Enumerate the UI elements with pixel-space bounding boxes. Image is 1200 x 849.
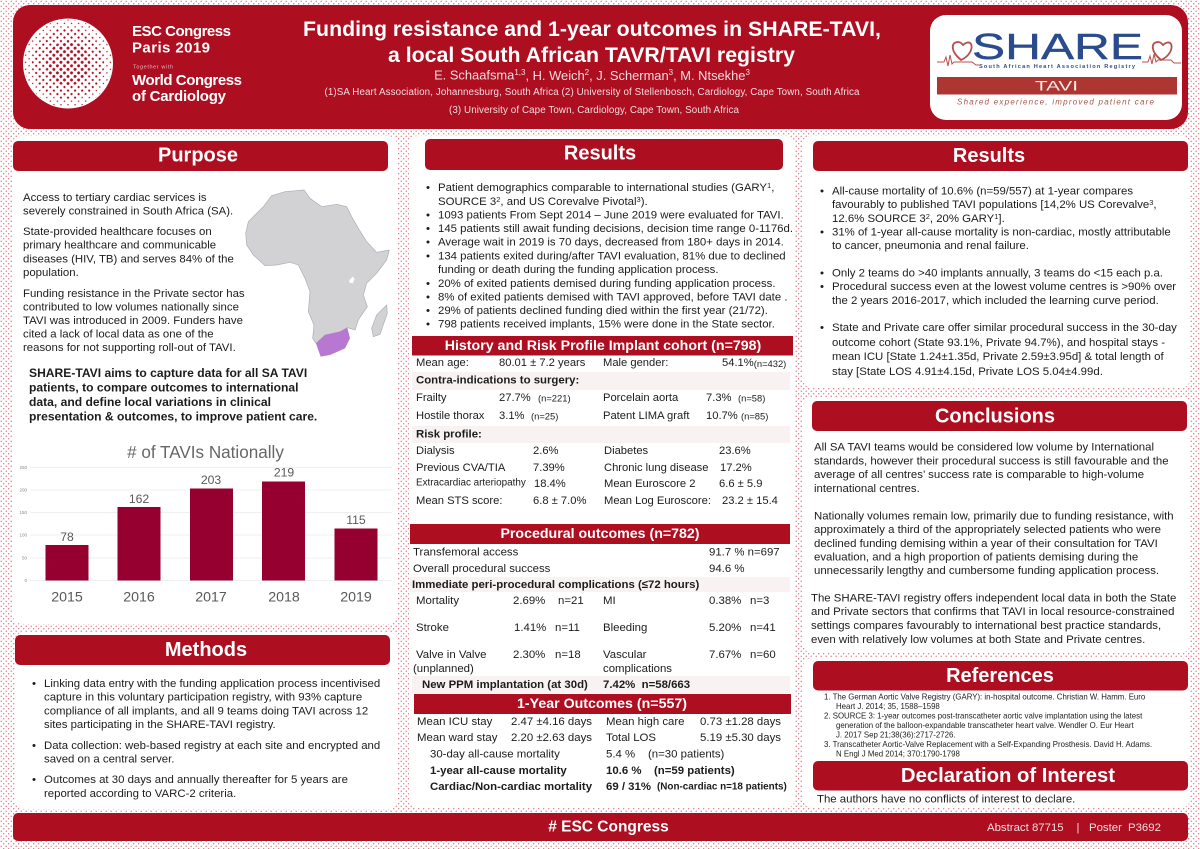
- table: history and risk profile: 23.2 ± 15.4: [722, 495, 778, 507]
- table: history and risk profile: Chronic lung disease: [604, 462, 708, 474]
- ESC congress wordmark: Together with: [133, 64, 173, 70]
- table: history and risk profile: (n=25): [531, 410, 558, 422]
- bar value labels: 162: [129, 492, 149, 506]
- bar value labels: [60, 466, 366, 544]
- table: 1-year outcomes: Mean ICU stay: [417, 716, 493, 728]
- table: history and risk profile: (n=221): [538, 392, 571, 404]
- methods bullets: •: [32, 740, 36, 752]
- results bullets: •: [820, 268, 824, 280]
- panel: results column three: [803, 136, 1190, 388]
- results bullets: 1: [767, 180, 771, 190]
- table header: Procedural outcomes (n=782): [500, 526, 700, 542]
- table: history and risk profile: (n=85): [741, 410, 768, 422]
- heading: conclusions: [812, 401, 1187, 431]
- conclusions text: [811, 442, 1176, 646]
- table: history and risk profile: 18.4%: [534, 478, 566, 490]
- purpose text: reasons for not supporting roll-out of TAVI.: [23, 342, 236, 354]
- y axis labels: 200: [19, 488, 27, 492]
- SHARE-TAVI logo: TAVI: [1035, 78, 1078, 94]
- hashtag: # ESC Congress: [548, 818, 669, 836]
- table: history and risk profile: 80.01 ± 7.2 years: [499, 357, 586, 369]
- year labels: 2016: [123, 590, 155, 606]
- methods bullets: Data collection: web-based registry at each site and encrypted and: [44, 740, 380, 752]
- authors: 3: [669, 68, 674, 76]
- table: history and risk profile: 2.6%: [533, 445, 559, 457]
- table: history and risk profile: 6.8 ± 7.0%: [533, 495, 586, 507]
- conclusions text: average of all centres’ success rate is comparable to high-volume: [814, 469, 1144, 481]
- abstract and poster numbers: P3692: [1128, 822, 1161, 834]
- results bullets: State and Private care offer similar procedural success in the 30-day: [832, 322, 1177, 334]
- purpose text: diseases (HIV, TB) and serves 84% of the: [23, 254, 234, 266]
- year labels: 2015: [51, 590, 83, 606]
- heading: conclusions: Conclusions: [935, 406, 1055, 428]
- table: procedural outcomes: 0.38%: [709, 595, 741, 607]
- table: procedural outcomes: 2.30%: [513, 649, 545, 661]
- results bullets: , and US Corevalve Pivotal: [500, 196, 637, 208]
- table: history and risk profile: 7.3%: [706, 392, 732, 404]
- results bullets: •: [820, 281, 824, 293]
- table: 1-year outcomes: 5.4 %: [606, 748, 635, 760]
- table: procedural outcomes: Vascular: [603, 649, 647, 661]
- results bullets: •: [820, 226, 824, 238]
- year labels: [51, 590, 372, 606]
- affiliations: (1)SA Heart Association, Johannesburg, South Africa (2) University of Stellenbosch, Cardiology, Cape Town, South Africa: [324, 87, 860, 98]
- footer bar: [13, 813, 1188, 841]
- results bullets: the 2 years 2016-2017, which included the learning curve period.: [832, 295, 1159, 307]
- SHARE-TAVI logo: [930, 15, 1182, 120]
- table: procedural outcomes: 7.67%: [709, 649, 741, 661]
- table: history and risk profile: Diabetes: [604, 445, 649, 457]
- results bullets: 134 patients exited during/after TAVI evaluation, 81% due to declined: [438, 250, 786, 262]
- table: 1-year outcomes: 30-day all-cause mortality: [430, 748, 560, 760]
- SHARE-TAVI logo: Shared experience, improved patient care: [957, 98, 1155, 106]
- heading: results: Results: [564, 142, 636, 164]
- heading: results: [813, 141, 1188, 171]
- results bullets: funding or death during the funding application process.: [438, 264, 719, 276]
- table: 1-year outcomes: 5.19 ±5.30 days: [700, 732, 781, 744]
- results bullets: 3: [1149, 198, 1153, 206]
- year labels: 2017: [195, 590, 227, 606]
- heading: references: [813, 661, 1188, 690]
- purpose text: TAVI was introduced in 2009. Funders have: [23, 315, 243, 327]
- ESC congress wordmark: Paris 2019: [132, 40, 210, 56]
- purpose text: cited a lack of local data as one of the: [23, 328, 214, 340]
- table: procedural outcomes: [410, 524, 790, 693]
- table: procedural outcomes: MI: [603, 595, 616, 607]
- table: history and risk profile: Hostile thorax: [416, 410, 485, 422]
- reference list: [824, 692, 1152, 758]
- y axis labels: [19, 465, 27, 583]
- y axis labels: 100: [19, 532, 27, 538]
- table: history and risk profile: Frailty: [416, 392, 447, 404]
- results bullets: •: [820, 322, 824, 334]
- table: history and risk profile: Male gender:: [603, 357, 668, 369]
- results bullets: 2: [496, 194, 500, 204]
- icon: hearts and ECG lines: [937, 42, 1181, 66]
- table: procedural outcomes: 1.41%: [514, 622, 546, 634]
- conclusions text: unnecessarily lengthy and cumbersome funding application process.: [814, 565, 1159, 577]
- authors: , J. Scherman: [589, 68, 669, 82]
- table: 1-year outcomes: 10.6 %: [606, 765, 641, 777]
- table header: [412, 336, 793, 356]
- table: procedural outcomes: New PPM implantation (at 30d): [422, 679, 588, 691]
- table: procedural outcomes: n=18: [555, 649, 581, 661]
- results bullets: 1093 patients From Sept 2014 – June 2019 were evaluated for TAVI.: [438, 210, 784, 222]
- aim statement: patients, to compare outcomes to international: [29, 380, 298, 394]
- table: 1-year outcomes: 69 / 31%: [606, 781, 651, 793]
- chart title: # of TAVIs Nationally: [127, 443, 284, 462]
- table header: 1-Year Outcomes (n=557): [517, 696, 687, 712]
- conclusions text: and Private sectors that confirms that TAVI in local resource-constrained: [811, 606, 1174, 618]
- aim statement: data, and define local variations in clinical: [29, 395, 271, 409]
- results bullets: [820, 186, 1177, 378]
- ESC congress wordmark: [132, 23, 242, 105]
- table: history and risk profile: Porcelain aorta: [603, 392, 679, 404]
- abstract and poster numbers: Abstract 87715: [987, 822, 1064, 834]
- table: procedural outcomes: (unplanned): [413, 663, 474, 675]
- table: history and risk profile: Risk profile:: [416, 428, 482, 440]
- y axis labels: 50: [22, 556, 27, 560]
- results bullets: [426, 180, 793, 331]
- table: history and risk profile: Dialysis: [416, 445, 455, 457]
- table: 1-year outcomes: Cardiac/Non-cardiac mortality: [430, 781, 593, 793]
- results bullets: •: [426, 319, 430, 331]
- declaration text: The authors have no conflicts of interest to declare.: [817, 794, 1075, 806]
- table: history and risk profile: [412, 336, 793, 507]
- results bullets: •: [426, 278, 430, 290]
- table: procedural outcomes: n=41: [750, 622, 776, 634]
- abstract and poster numbers: |: [1076, 822, 1079, 834]
- year labels: 2018: [268, 590, 300, 606]
- table: 1-year outcomes: Mean ward stay: [417, 732, 498, 744]
- affiliations: [324, 87, 860, 116]
- results bullets: •: [820, 186, 824, 198]
- heading: declaration of interest: [813, 761, 1188, 790]
- affiliations: (3) University of Cape Town, Cardiology, Cape Town, South Africa: [449, 105, 740, 116]
- icon: map of Africa with South Africa highlighted: [246, 190, 389, 357]
- table: 1-year outcomes: Total LOS: [606, 732, 656, 744]
- table: procedural outcomes: 5.20%: [709, 622, 741, 634]
- conclusions text: international centres.: [814, 483, 920, 495]
- conclusions text: evaluation, and a high proportion of patients demising during the: [814, 552, 1138, 564]
- heading: results: Results: [953, 145, 1025, 167]
- results bullets: 1: [994, 212, 998, 220]
- table: procedural outcomes: 94.6 %: [709, 563, 744, 575]
- table header: History and Risk Profile Implant cohort (n=798): [445, 338, 762, 354]
- purpose text: population.: [23, 267, 79, 279]
- results bullets: , 20% GARY: [930, 213, 995, 225]
- conclusions text: settings compares favourably to international best practice standards,: [811, 620, 1161, 632]
- table: 1-year outcomes: 1-year all-cause mortality: [430, 765, 567, 777]
- methods bullets: capture in this voluntary participation registry, with 93% capture: [44, 692, 362, 704]
- conclusions text: declined funding demising within a year of their consultation for TAVI: [814, 538, 1158, 550]
- icon: ESC dotted globe: [23, 18, 113, 108]
- authors: , H. Weich: [525, 68, 585, 82]
- reference list: 2. SOURCE 3: 1-year outcomes post-transcatheter aortic valve implantation using the latest: [824, 712, 1143, 720]
- results bullets: Patient demographics comparable to international studies (GARY: [438, 182, 767, 194]
- results bullets: Only 2 teams do >40 implants annually, 3 teams do <15 each p.a.: [832, 268, 1163, 280]
- table: 1-year outcomes: [414, 694, 791, 793]
- table: history and risk profile: 27.7%: [499, 392, 531, 404]
- reference list: Heart J. 2014; 35, 1588–1598: [836, 702, 940, 711]
- SHARE-TAVI logo: SHARE: [972, 26, 1143, 67]
- heading: references: References: [946, 665, 1054, 687]
- methods bullets: [32, 678, 380, 800]
- authors: 3: [745, 68, 750, 76]
- table: procedural outcomes: complications: [603, 663, 672, 675]
- table: history and risk profile: Mean age:: [416, 357, 469, 369]
- table: 1-year outcomes: 2.20 ±2.63 days: [511, 732, 592, 744]
- conclusions text: Nationally volumes remain low, primarily due to funding resistance, with: [814, 510, 1174, 522]
- purpose text: Funding resistance in the Private sector has: [23, 288, 245, 300]
- table: history and risk profile: 54.1%(n=432): [722, 357, 786, 369]
- results bullets: stay [State LOS 4.91±4.15d, Private LOS 5.04±4.99d.: [832, 366, 1103, 378]
- table: procedural outcomes: Transfemoral access: [413, 546, 519, 558]
- table: 1-year outcomes: (n=59 patients): [654, 765, 735, 777]
- table: history and risk profile: 6.6 ± 5.9: [719, 478, 762, 490]
- conclusions text: approximately a third of the appropriately selected patients who were: [814, 524, 1161, 536]
- purpose text: Access to tertiary cardiac services is: [23, 192, 207, 204]
- purpose text: [23, 192, 245, 354]
- ESC congress wordmark: World Congress: [132, 72, 242, 89]
- methods bullets: saved on a central server.: [44, 754, 174, 766]
- aim statement: [29, 366, 317, 424]
- panel: results column two: [409, 136, 795, 808]
- results bullets: •: [426, 182, 430, 194]
- results bullets: to cancer, pneumonia and renal failure.: [832, 240, 1029, 252]
- results bullets: 20% of exited patients demised during funding application process.: [438, 278, 776, 290]
- heading: declaration of interest: Declaration of Interest: [901, 765, 1115, 787]
- conclusions text: even with relatively low volumes at both State and Private centres.: [811, 634, 1145, 646]
- title: a local South African TAVR/TAVI registry: [388, 43, 795, 67]
- conclusions text: standards, however their procedural success is still favourable and the: [814, 456, 1169, 468]
- heading: methods: Methods: [165, 639, 247, 661]
- table: procedural outcomes: Overall procedural success: [413, 563, 551, 575]
- results bullets: favourably to published TAVI populations [14,2% US Corevalve: [832, 199, 1149, 211]
- results bullets: •: [426, 305, 430, 317]
- ESC congress wordmark: ESC Congress: [132, 23, 231, 40]
- table: procedural outcomes: 2.69%: [513, 595, 545, 607]
- header banner: [13, 5, 1188, 129]
- results bullets: ).: [641, 196, 648, 208]
- results bullets: 2: [926, 212, 930, 220]
- table: history and risk profile: Patent LIMA graft: [603, 410, 690, 422]
- authors: 2: [585, 68, 590, 76]
- table: 1-year outcomes: 0.73 ±1.28 days: [700, 716, 781, 728]
- SHARE-TAVI logo: South African Heart Association Registry: [979, 64, 1136, 70]
- table: procedural outcomes: n=60: [750, 649, 776, 661]
- results bullets: ,: [771, 182, 774, 194]
- reference list: generation of the balloon-expandable transcatheter heart valve. Wendler O. Eur Heart: [836, 721, 1134, 730]
- results bullets: 798 patients received implants, 15% were done in the State sector.: [438, 319, 775, 331]
- bar value labels: 219: [274, 466, 294, 480]
- results bullets: 12.6% SOURCE 3: [832, 213, 926, 225]
- table: history and risk profile: 10.7%: [706, 410, 738, 422]
- conclusions text: All SA TAVI teams would be considered low volume by International: [814, 442, 1154, 454]
- purpose text: contributed to low volumes nationally since: [23, 302, 239, 314]
- results bullets: ,: [1153, 199, 1157, 211]
- ESC congress wordmark: of Cardiology: [132, 88, 227, 105]
- table: 1-year outcomes: (Non-cardiac n=18 patients): [657, 782, 787, 792]
- table: 1-year outcomes: Mean high care: [606, 716, 685, 728]
- heading: purpose: [13, 141, 388, 171]
- bars: [46, 482, 378, 580]
- results bullets: Average wait in 2019 is 70 days, decreased from 180+ days in 2014.: [438, 237, 784, 249]
- table: 1-year outcomes: (n=30 patients): [648, 748, 725, 760]
- table: procedural outcomes: Mortality: [416, 595, 459, 607]
- authors: 1,3: [514, 68, 526, 76]
- table: procedural outcomes: Valve in Valve: [416, 649, 486, 661]
- heading: methods: [15, 635, 390, 665]
- abstract and poster numbers: Poster: [1089, 822, 1122, 834]
- table: history and risk profile: Mean Log Euroscore:: [604, 495, 711, 507]
- methods bullets: •: [32, 774, 36, 786]
- methods bullets: compliance of all implants, and all 9 teams doing TAVI across 12: [44, 706, 368, 718]
- bar value labels: 203: [201, 473, 221, 487]
- table: history and risk profile: Extracardiac arteriopathy: [416, 478, 526, 488]
- table: procedural outcomes: Bleeding: [603, 622, 647, 634]
- table: procedural outcomes: Immediate peri-procedural complications (≤72 hours): [412, 579, 699, 591]
- reference list: 1. The German Aortic Valve Registry (GARY): in-hospital outcome. Christian W. Hamm. Euro: [824, 692, 1146, 702]
- year labels: 2019: [340, 590, 372, 606]
- table: 1-year outcomes: 2.47 ±4.16 days: [511, 716, 592, 728]
- methods bullets: reported according to VARC-2 criteria.: [44, 788, 236, 800]
- aim statement: SHARE-TAVI aims to capture data for all SA TAVI: [29, 366, 307, 380]
- table: history and risk profile: Contra-indications to surgery:: [416, 375, 579, 387]
- table header: [414, 694, 791, 714]
- heading: results: [425, 139, 783, 170]
- results bullets: •: [426, 223, 430, 235]
- panel: purpose: [13, 136, 397, 624]
- table: procedural outcomes: 7.42% n=58/663: [603, 679, 690, 691]
- table: procedural outcomes: n=3: [750, 595, 769, 607]
- panel: conclusions: [803, 397, 1190, 653]
- panel: methods: [15, 632, 398, 809]
- table: procedural outcomes: n=11: [555, 622, 580, 634]
- table header: [410, 524, 790, 544]
- table: history and risk profile: Mean Euroscore 2: [604, 478, 695, 490]
- abstract and poster numbers: [987, 822, 1161, 834]
- authors: E. Schaafsma: [434, 68, 514, 82]
- results bullets: •: [426, 210, 430, 222]
- methods bullets: Linking data entry with the funding application process incentivised: [44, 678, 380, 690]
- results bullets: 8% of exited patients demised with TAVI approved, before TAVI date .: [438, 292, 788, 304]
- results bullets: •: [426, 237, 430, 249]
- results bullets: Procedural success even at the lowest volume centres is >90% over: [832, 281, 1176, 293]
- table: procedural outcomes: Stroke: [416, 622, 449, 634]
- results bullets: 145 patients still await funding decisions, decision time range 0-1176d.: [438, 223, 793, 235]
- results bullets: outcome cohort (State 93.1%, Private 94.7%), and hospital stays -: [832, 337, 1165, 349]
- authors: , M. Ntsekhe: [673, 68, 745, 82]
- table: procedural outcomes: n=21: [558, 595, 584, 607]
- panel: references: [803, 658, 1190, 808]
- y axis labels: 250: [19, 465, 27, 470]
- table: procedural outcomes: 91.7 % n=697: [709, 546, 780, 558]
- reference list: J. 2017 Sep 21;38(36):2717-2726.: [836, 730, 956, 740]
- conclusions text: The SHARE-TAVI registry offers independent local data in both the State: [811, 592, 1176, 604]
- heading: purpose: Purpose: [158, 144, 238, 166]
- results bullets: mean ICU [State 1.24±1.35d, Private 2.59±3.95d] & total length of: [832, 351, 1164, 363]
- methods bullets: Outcomes at 30 days and annually thereafter for 5 years are: [44, 774, 348, 786]
- table: history and risk profile: (n=58): [738, 392, 765, 404]
- table: history and risk profile: 23.6%: [719, 445, 751, 457]
- aim statement: presentation & outcomes, to improve patient care.: [29, 410, 317, 424]
- table: history and risk profile: Mean STS score:: [416, 495, 502, 507]
- bar value labels: 78: [60, 530, 74, 544]
- results bullets: 29% of patients declined funding died within the first year (21/72).: [438, 305, 768, 317]
- results bullets: All-cause mortality of 10.6% (n=59/557) at 1-year compares: [832, 186, 1133, 198]
- table: history and risk profile: 17.2%: [720, 462, 752, 474]
- y axis labels: 150: [19, 510, 27, 515]
- results bullets: 3: [637, 194, 641, 204]
- methods bullets: •: [32, 678, 36, 690]
- reference list: 3. Transcatheter Aortic-Valve Replacement with a Self-Expanding Prosthesis. David H. Adams.: [824, 740, 1152, 749]
- table: history and risk profile: Previous CVA/TIA: [416, 462, 506, 474]
- results bullets: •: [426, 292, 430, 304]
- table: history and risk profile: 3.1%: [499, 410, 525, 422]
- reference list: N Engl J Med 2014; 370:1790-1798: [836, 750, 960, 758]
- results bullets: 31% of 1-year all-cause mortality is non-cardiac, mostly attributable: [832, 226, 1171, 238]
- methods bullets: sites participating in the SHARE-TAVI registry.: [44, 719, 276, 731]
- results bullets: ].: [998, 213, 1005, 225]
- purpose text: severely constrained in South Africa (SA).: [23, 206, 233, 218]
- title: Funding resistance and 1-year outcomes in SHARE-TAVI,: [303, 17, 881, 41]
- purpose text: primary healthcare and communicable: [23, 240, 216, 252]
- purpose text: State-provided healthcare focuses on: [23, 226, 212, 238]
- title: [303, 17, 881, 67]
- y axis labels: 0: [24, 578, 27, 583]
- table: history and risk profile: 7.39%: [533, 462, 565, 474]
- results bullets: •: [426, 250, 430, 262]
- results bullets: SOURCE 3: [438, 196, 496, 208]
- bar chart: number of TAVIs nationally: [19, 443, 392, 606]
- bar value labels: 115: [346, 513, 366, 527]
